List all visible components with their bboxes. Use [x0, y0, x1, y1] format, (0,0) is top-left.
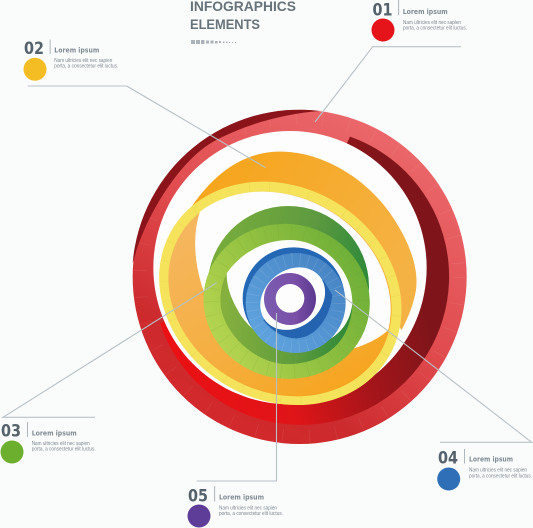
callout 02: 02 — [24, 39, 44, 59]
purple ring — [264, 273, 316, 325]
callout 01 — [372, 0, 467, 42]
callout 04: Lorem ipsum — [469, 455, 513, 464]
callout 02: Lorem ipsum — [54, 46, 99, 54]
blue ring — [243, 247, 346, 353]
red ring — [133, 110, 467, 444]
callout 03: 03 — [1, 422, 21, 442]
callout 02 — [24, 39, 118, 81]
icon: purple dot — [188, 504, 210, 528]
callout 05: 05 — [188, 486, 208, 506]
callout 05 — [188, 486, 283, 528]
title — [190, 0, 296, 32]
callout 05: Lorem ipsum — [219, 493, 264, 502]
callout 04: 04 — [438, 448, 458, 468]
callout 01: Nam ultricies elit nec sapien — [403, 20, 461, 26]
leader line 05 — [197, 313, 276, 481]
leader line 04 — [335, 290, 532, 442]
callout 01: Lorem ipsum — [403, 7, 448, 16]
concentric spiral rings chart — [118, 110, 467, 449]
callout 01: porta, a consectetur elit luctus. — [403, 26, 467, 32]
callout 03 — [0, 422, 96, 464]
title: ELEMENTS — [190, 16, 260, 32]
orange and yellow ring — [118, 138, 442, 449]
callout 03: Nam ultricies elit nec sapien — [32, 441, 90, 447]
callout 03: porta, a consectetur elit luctus. — [32, 447, 96, 453]
green ring — [191, 206, 382, 392]
callout 04: Nam ultricies elit nec sapien — [469, 468, 527, 474]
leader line 02 — [28, 86, 266, 168]
icon: green dot — [0, 440, 24, 464]
icon: yellow dot — [24, 58, 46, 81]
callout 02: porta, a consectetur elit luctus. — [54, 64, 118, 70]
leader line 01 — [315, 47, 461, 122]
callout 04 — [437, 448, 532, 490]
callout 02: Nam ultricies elit nec sapien — [54, 58, 113, 64]
title dots — [191, 40, 236, 44]
callout 05: porta, a consectetur elit luctus. — [219, 511, 283, 517]
callout 05: Nam ultricies elit nec sapien — [219, 505, 277, 511]
callout 03: Lorem ipsum — [32, 428, 77, 437]
icon: blue dot — [437, 468, 460, 490]
leader line 03 — [3, 283, 217, 417]
callout 01: 01 — [372, 0, 392, 20]
icon: red dot — [372, 18, 394, 42]
